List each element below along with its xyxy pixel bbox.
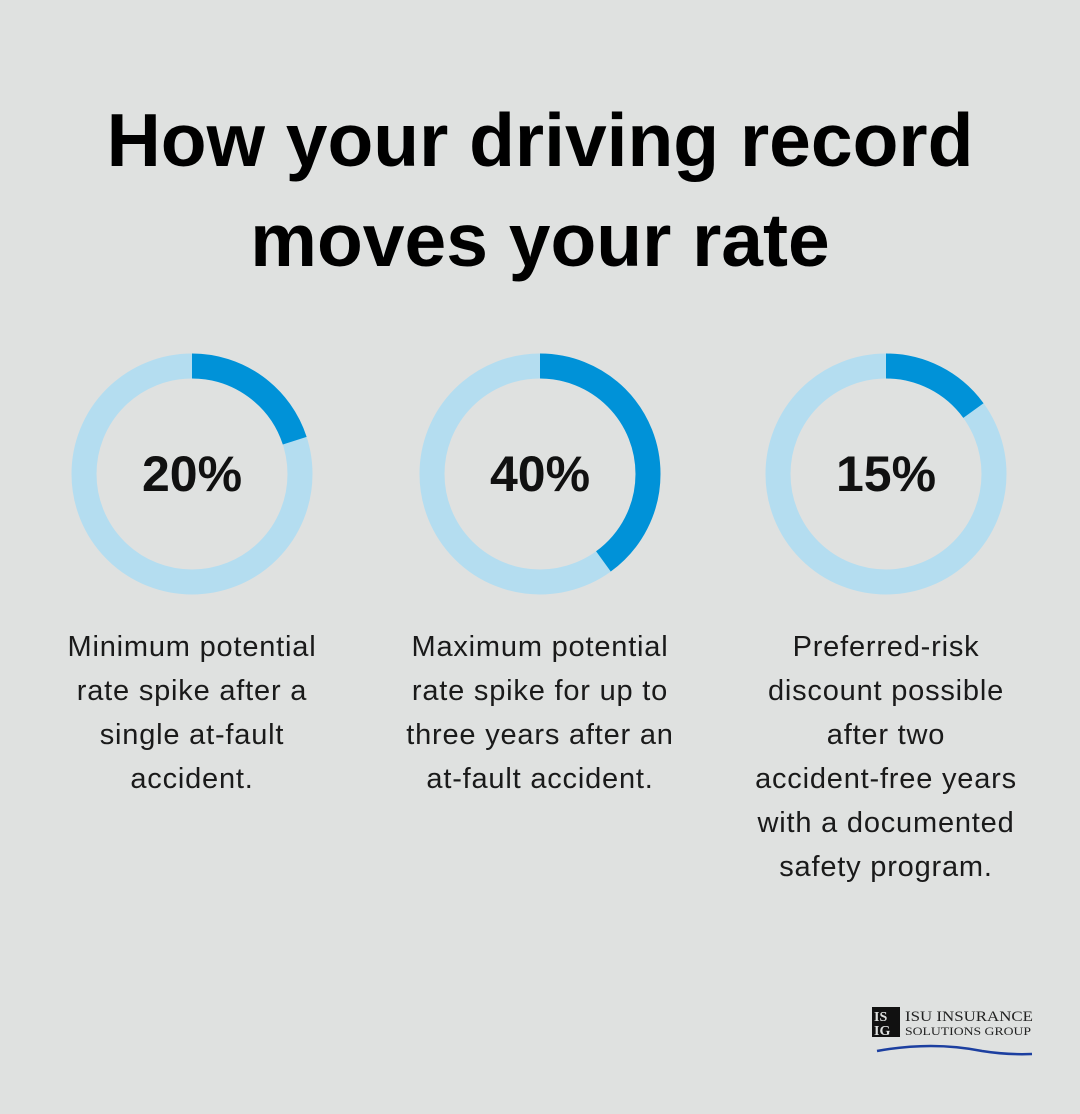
logo: SOLUTIONS GROUP — [905, 1024, 1031, 1038]
donut chart 40% — [420, 354, 660, 594]
description 40%: three years after an — [406, 719, 674, 751]
donut chart 20% — [72, 354, 312, 594]
panel: 20% — [68, 354, 316, 795]
stat 15%: 15% — [836, 446, 936, 502]
description 20% — [68, 631, 316, 795]
logo: IG — [874, 1024, 890, 1039]
description 40% — [406, 631, 674, 795]
description 20%: accident. — [130, 763, 254, 795]
description 15%: discount possible — [768, 675, 1004, 707]
stat 40%: 40% — [490, 446, 590, 502]
donut chart 15% — [766, 354, 1006, 594]
description 15%: after two — [827, 719, 945, 751]
description 15%: with a documented — [757, 807, 1015, 839]
description 15%: accident-free years — [755, 763, 1017, 795]
logo — [872, 1007, 1033, 1056]
description 20%: single at-fault — [100, 719, 284, 751]
stat 20%: 20% — [142, 446, 242, 502]
title: moves your rate — [250, 198, 830, 282]
title: How your driving record — [107, 98, 973, 182]
description 20%: rate spike after a — [77, 675, 307, 707]
description 40%: Maximum potential — [412, 631, 668, 663]
description 15%: Preferred-risk — [793, 631, 979, 663]
logo: IS — [874, 1010, 887, 1025]
description 40%: at-fault accident. — [426, 763, 654, 795]
panel: 40% — [406, 354, 674, 795]
description 15% — [755, 631, 1017, 883]
description 20%: Minimum potential — [68, 631, 316, 663]
description 15%: safety program. — [779, 851, 993, 883]
logo: ISU INSURANCE — [905, 1009, 1033, 1025]
title — [107, 98, 973, 282]
panel: 15% — [755, 354, 1017, 883]
description 40%: rate spike for up to — [412, 675, 668, 707]
